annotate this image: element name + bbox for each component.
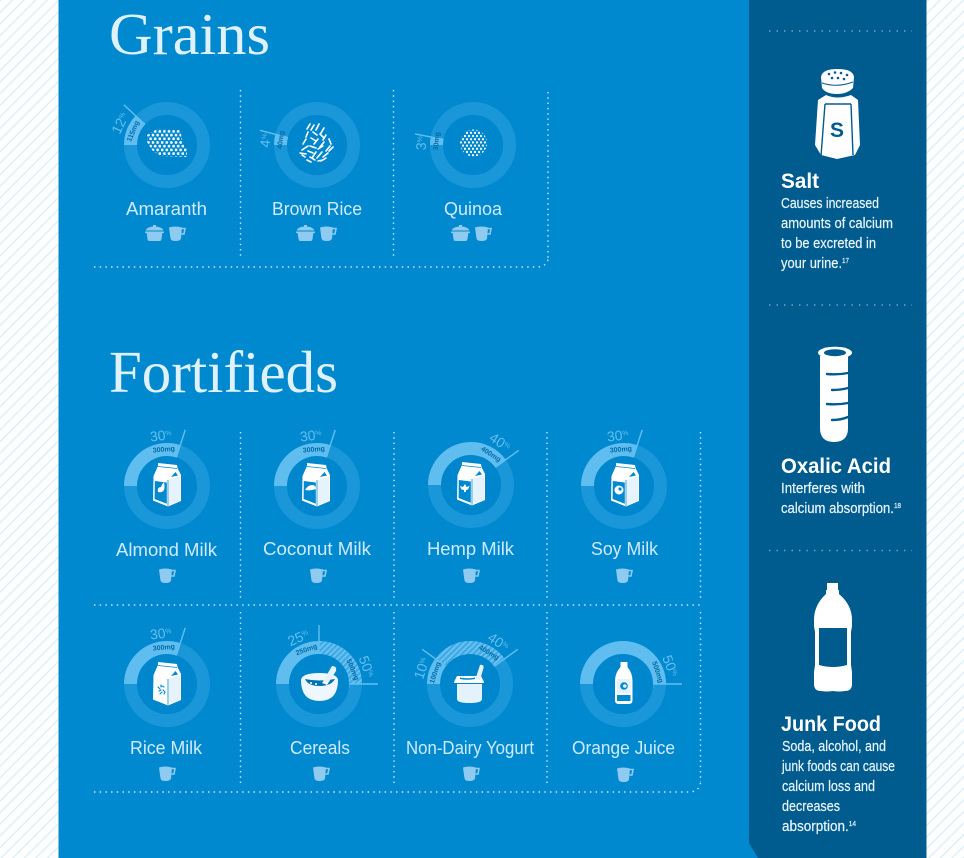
name: Quinoa: [444, 198, 503, 219]
icon: cup: [310, 568, 326, 583]
body text: Interferes with: [781, 481, 865, 497]
tile: Rice Milk: [130, 624, 204, 781]
ring chart: 10% to 40%: %: [501, 641, 510, 650]
icon: test tube: [818, 347, 852, 442]
heading: Oxalic Acid: [781, 455, 891, 478]
ring chart: 10% to 40%: %: [419, 657, 428, 665]
ring chart: 25% to 50%: 50: [356, 654, 376, 674]
icon: salt shaker: [815, 69, 860, 159]
tile: Non-Dairy Yogurt: [406, 629, 534, 781]
icon: cup: [159, 568, 175, 583]
body text: [781, 739, 895, 835]
icons: pot and cup: [451, 225, 491, 241]
name: Coconut Milk: [263, 538, 372, 559]
tile: Soy Milk: [588, 426, 660, 583]
name: Brown Rice: [272, 198, 362, 219]
icon: cereal bowl: [301, 666, 338, 701]
ring chart: 30%: %: [622, 430, 629, 438]
ring chart: 30%: 30: [149, 625, 166, 643]
icon: cup: [313, 766, 329, 781]
ring chart: 3%: 30mg: [433, 132, 442, 151]
name: Hemp Milk: [427, 538, 515, 559]
ring chart: 4%: 4: [257, 139, 273, 148]
body text: [781, 196, 893, 272]
ring chart: 4%: 40mg: [277, 130, 286, 150]
ring chart: 25% to 50%: 250mg: [295, 643, 318, 657]
icon: cup: [616, 568, 632, 583]
icon: cup: [463, 766, 479, 781]
ring chart: 50%: %: [669, 669, 678, 677]
icon: brown rice grains: [300, 124, 333, 162]
ring chart: 30%: 300mg: [153, 446, 175, 455]
ring chart: 30%: [130, 426, 204, 522]
tile: Cereals: [282, 625, 378, 781]
name: Orange Juice: [572, 737, 675, 758]
ring chart: 4%: [257, 108, 354, 182]
heading: Fortifieds: Fortifieds: [109, 339, 338, 405]
name: Non-Dairy Yogurt: [406, 737, 534, 758]
body text: calcium loss and: [782, 779, 875, 795]
body text: calcium absorption.: [781, 501, 906, 517]
icon: cup: [463, 568, 479, 583]
dark sidebar panel: [749, 0, 926, 858]
ring chart: 12%: [108, 105, 204, 182]
body text: Soda, alcohol, and: [782, 739, 886, 755]
ring chart: 30%: %: [315, 430, 322, 438]
icon: soy milk carton: [611, 463, 639, 506]
tile: Brown Rice: [257, 108, 362, 241]
ring chart: 25% to 50%: 500mg: [345, 658, 360, 682]
ring chart: 10% to 40%: 400mg: [477, 644, 500, 662]
ring chart: 40%: [434, 429, 519, 522]
ring chart: 30%: 30: [149, 427, 166, 445]
ring chart: 10% to 40%: [411, 629, 518, 720]
icon: cup: [159, 766, 175, 781]
sidebar item: Oxalic Acid: [781, 347, 901, 517]
icon: almond milk carton: [153, 463, 181, 506]
body text: 18: [894, 503, 901, 510]
icon: cup: [617, 768, 633, 782]
name: Almond Milk: [116, 539, 218, 560]
ring chart: 3%: 3: [413, 142, 429, 150]
ring chart: 4%: %: [261, 133, 269, 140]
ring chart: 25% to 50%: %: [366, 670, 374, 678]
body text: 17: [842, 258, 849, 265]
ring chart: 12%: 115mg: [126, 120, 141, 143]
ring chart: 50%: 50: [659, 653, 680, 673]
icon: rice milk carton: [153, 662, 181, 706]
body text: decreases: [782, 799, 840, 815]
grains grid lines: [94, 90, 548, 267]
sidebar item: Junk Food: [781, 583, 895, 835]
heading: Junk Food: [781, 713, 881, 736]
body text: your urine.: [781, 256, 850, 272]
ring chart: 30%: [280, 426, 354, 522]
icons: pot and cup: [296, 225, 336, 241]
ring chart: 25% to 50%: %: [301, 629, 309, 638]
ring chart: 30%: 30: [606, 427, 623, 445]
main blue panel: [58, 0, 758, 858]
icon: yogurt cup: [454, 665, 484, 703]
ring chart: 12%: %: [118, 111, 127, 120]
body text: absorption.: [782, 819, 854, 835]
ring chart: 40%: 400mg: [479, 446, 502, 464]
body text: 14: [849, 821, 856, 828]
ring chart: 25% to 50%: 25: [285, 628, 306, 649]
tile: Hemp Milk: [427, 429, 519, 583]
name: Cereals: [290, 737, 350, 758]
fortifieds grid lines: [94, 432, 701, 792]
icon: hemp milk carton: [457, 462, 485, 506]
icon: coconut milk carton: [302, 463, 330, 506]
ring chart: 30%: %: [165, 430, 172, 438]
icon: salt shaker: S: [830, 119, 844, 142]
name: Rice Milk: [130, 737, 203, 758]
ring chart: 10% to 40%: 40: [485, 629, 507, 651]
icon: amaranth seeds: [147, 129, 187, 157]
tile: Coconut Milk: [263, 426, 372, 583]
ring chart: 10% to 40%: 100mg: [429, 661, 443, 685]
name: Soy Milk: [591, 538, 659, 559]
sidebar item: Salt: [781, 69, 893, 272]
ring chart: 30%: 300mg: [303, 446, 325, 455]
ring chart: 10% to 40%: 10: [411, 661, 431, 681]
ring chart: 3%: [413, 108, 510, 182]
icon: juice bottle: [615, 662, 632, 704]
ring chart: 40%: %: [502, 441, 511, 450]
tile: Quinoa: [413, 108, 510, 241]
ring chart: 30%: [130, 624, 204, 720]
ring chart: 30%: %: [165, 628, 172, 636]
ring chart: 3%: %: [417, 136, 424, 143]
body text: Causes increased: [781, 196, 879, 212]
body text: [781, 481, 901, 517]
heading: Salt: [781, 170, 819, 193]
ring chart: 30%: [588, 426, 660, 522]
heading: Grains: Grains: [109, 1, 270, 67]
ring chart: 30%: 300mg: [153, 644, 175, 653]
tile: Amaranth: [108, 105, 207, 241]
ring chart: 30%: 30: [299, 427, 316, 445]
ring chart: 50%: [586, 648, 682, 720]
body text: junk foods can cause: [781, 759, 895, 775]
name: Amaranth: [126, 198, 207, 219]
body text: amounts of calcium: [781, 216, 893, 232]
sidebar dotted dividers: [769, 31, 912, 550]
icon: soda bottle: [814, 583, 852, 692]
ring chart: 12%: 12: [108, 115, 129, 136]
icon: quinoa seeds: [460, 130, 487, 156]
ring chart: 40%: 40: [487, 429, 508, 451]
ring chart: 25% to 50%: [282, 625, 378, 720]
tile: Almond Milk: [116, 426, 218, 583]
ring chart: 50%: 500mg: [650, 661, 664, 684]
ring chart: 30%: 300mg: [610, 446, 632, 455]
body text: to be excreted in: [781, 236, 876, 252]
tile: Orange Juice: [572, 648, 682, 782]
icons: pot and cup: [145, 225, 185, 241]
